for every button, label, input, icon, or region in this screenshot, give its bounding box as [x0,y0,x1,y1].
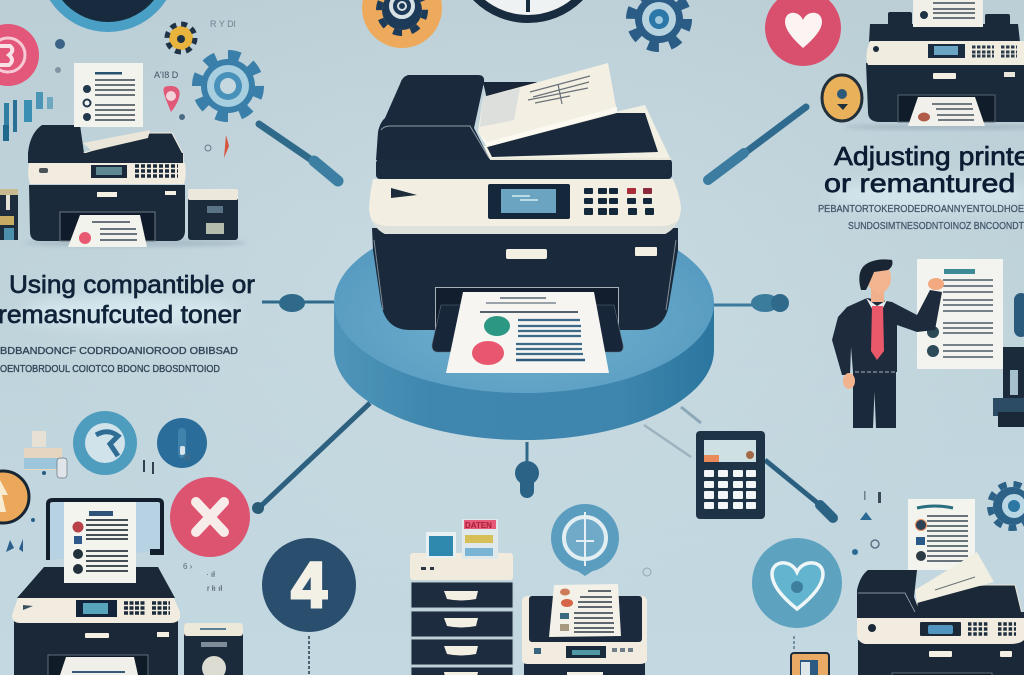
heading: Adjusting printer: or remantured r [824,168,1024,198]
icon: toner box left edge [0,189,18,240]
icon: gear right edge [990,484,1024,528]
product boxes [426,532,456,558]
small blue dot and specks: A'I8 D [154,70,179,80]
output slot [436,288,618,342]
display [488,184,570,219]
icon: toner cartridge bottom left [184,623,243,675]
control band [857,618,1024,644]
handles [506,249,547,259]
body [858,640,1024,675]
connector: top left [259,124,338,181]
icon: blue gear [197,55,259,117]
specks: bottom left: 6 › [183,562,193,571]
heading: Using compatible toner [0,271,255,329]
icon: partial machine right edge [993,293,1024,427]
document on easel [917,259,1003,369]
fine print: left [0,346,238,375]
feeder tray [480,88,520,127]
icon: red heart circle [765,0,841,66]
connector: faint lines bottom right [644,407,701,457]
icon: pink map pin [164,86,180,112]
fine print: right [818,204,1024,232]
icon: compass badge [551,504,619,576]
frame [48,500,162,560]
platen [917,585,1022,614]
heading: Using compatible toner: Using compantible or [9,271,255,299]
icon: mini bar chart left [3,92,53,141]
hinge band [376,159,672,179]
figure: man presenting [832,259,944,428]
printed page [446,292,609,373]
icon: teal wrench badge [73,411,137,475]
lid [17,567,175,598]
icon: top-left teal dark circle [39,0,177,32]
keypad [584,188,654,215]
scanner platen [484,105,671,160]
printer body [29,185,185,241]
panel: printer bottom right [857,499,1024,675]
icon: clock dial top centre [455,0,601,19]
icon: calculator [696,431,765,519]
fine print: left: OENTOBRDOUL COIOTCO BDONC DBOSDNTOIOD [0,364,220,375]
specks: bottom left: r łı ıł [207,584,222,593]
output sheet [908,97,985,126]
control band [12,598,180,623]
icon: gold circle [822,75,862,121]
heading: Using compatible toner: remasnufcuted toner [0,301,241,329]
icon: red X circle [170,477,250,557]
connector: right [714,294,812,312]
specks: bottom right [643,491,881,576]
icon: orange badge with gear [362,0,442,48]
icon: blue heart circle [752,538,842,650]
sheet top [913,0,983,27]
feed sheet [915,552,994,603]
central printer [369,63,681,373]
body [14,620,178,675]
output paper [68,215,147,247]
lid [857,570,920,613]
icon: gold badge left edge [0,471,29,523]
slot [898,95,995,122]
output sheet [60,657,138,675]
heading: Adjusting printer: Adjusting printer [834,141,1024,171]
connector: left [262,294,334,312]
icon: pink burst badge [0,24,39,86]
fine print: left: BDBANDONCF CODRDOANIOROOD OBIBSAD [0,346,238,357]
icon: gear top centre [631,0,687,47]
small blue dot and specks: R Y Dl [210,19,236,29]
page [64,502,136,583]
lid [869,24,1020,42]
panel: printer top right [845,0,1024,130]
printer lower body [372,228,678,330]
filing cabinet: DATEN [465,521,492,530]
connector: bottom centre [515,442,539,498]
cream control band [369,179,681,234]
icon: hand sticker [24,431,67,478]
heading: Adjusting printer [824,141,1024,211]
printer control band [28,163,186,184]
filing cabinet [410,519,513,675]
specks: bottom left [6,453,222,593]
icon: blue mouse badge [157,418,207,468]
connector: top right [708,107,806,180]
lid [28,125,84,153]
control band [866,41,1024,65]
connector: calculator to right [765,460,833,518]
icon: small orange card [791,653,829,675]
scanner lid [376,75,490,160]
panel: printer top left [23,63,247,247]
small blue dot and specks [55,19,236,158]
panel: printer bottom centre [522,584,647,675]
page [908,499,975,570]
back hopper [483,82,612,112]
connector: bottom left [252,403,370,514]
feeder paper [478,63,617,147]
panel: printer bottom left [12,500,180,675]
icon: gold gear [167,24,195,52]
icon: number four circle [262,538,356,675]
specks: bottom left: IS [183,453,191,462]
body [866,63,1024,122]
page [549,584,621,637]
upper paper sheet [74,63,143,127]
icon: toner box next to printer [188,189,238,240]
platform disc [334,213,714,440]
specks: bottom left: · ıł [206,570,215,579]
icon: number four circle: 4 [291,549,327,621]
